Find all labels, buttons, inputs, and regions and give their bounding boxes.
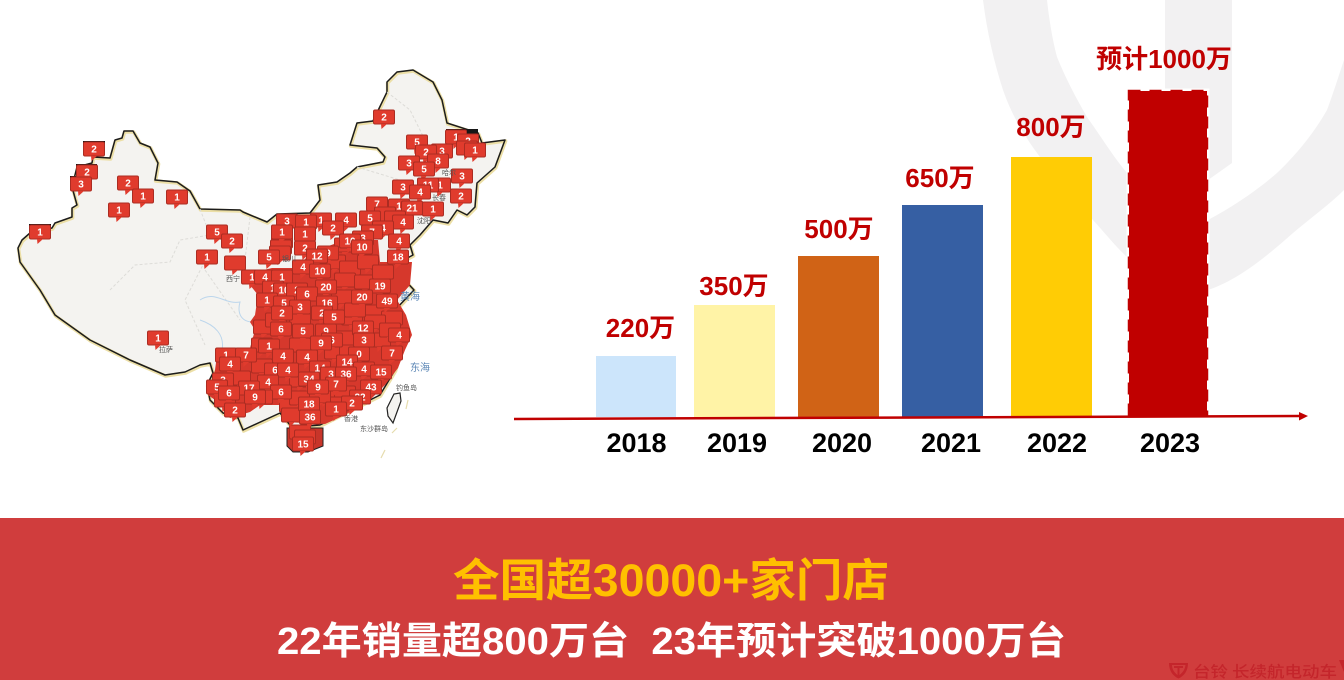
china map xyxy=(18,70,506,458)
numbered markers: 3 xyxy=(439,146,445,158)
bar chart: yearly sales xyxy=(514,44,1308,458)
numbered markers: 9 xyxy=(325,248,331,260)
numbered markers: 1 xyxy=(303,218,309,228)
map land outline xyxy=(18,70,506,431)
numbered markers: 5 xyxy=(414,138,420,148)
numbered markers: 2 xyxy=(349,398,355,410)
numbered markers: 17 xyxy=(243,384,255,394)
numbered markers: 5 xyxy=(421,164,427,176)
year labels xyxy=(606,428,1200,458)
numbered markers: 2 xyxy=(125,178,131,190)
bar 2021 xyxy=(902,205,983,417)
numbered markers: 2 xyxy=(302,244,308,254)
numbered markers: 4 xyxy=(396,330,402,342)
numbered markers: 3 xyxy=(328,370,334,380)
numbered markers: 0 xyxy=(356,350,362,360)
year labels: 2019 xyxy=(707,428,767,458)
numbered markers: 22 xyxy=(354,392,366,404)
bar 2019 xyxy=(694,305,775,417)
numbered markers: 20 xyxy=(320,282,332,294)
numbered markers: 1 xyxy=(223,350,229,362)
numbered markers: 7 xyxy=(389,348,395,360)
numbered markers: 6 xyxy=(226,388,232,400)
year labels: 2022 xyxy=(1027,428,1087,458)
numbered markers: 6 xyxy=(329,336,335,346)
numbered markers: 9 xyxy=(252,392,258,404)
numbered markers: 3 xyxy=(220,376,226,386)
numbered markers: 34 xyxy=(303,374,315,386)
numbered markers: 2 xyxy=(232,406,238,416)
map place labels: 东海 xyxy=(410,359,430,374)
map place labels: 东沙群岛 xyxy=(360,424,388,434)
numbered markers: 1 xyxy=(279,272,285,284)
numbered markers: 4 xyxy=(417,188,423,198)
year labels: 2020 xyxy=(812,428,872,458)
numbered markers: 7 xyxy=(333,380,339,390)
numbered markers: 49 xyxy=(381,296,393,308)
numbered markers: 12 xyxy=(357,324,369,334)
value labels: 预计1000万 xyxy=(1096,44,1232,74)
numbered markers: 2 xyxy=(423,148,429,158)
numbered markers: 2 xyxy=(91,144,97,156)
numbered markers: 36 xyxy=(304,412,316,424)
watermark: logo shield arcs xyxy=(983,0,1344,290)
numbered markers: 8 xyxy=(435,156,441,168)
numbered markers: 9 xyxy=(315,382,321,394)
numbered markers: 1 xyxy=(204,252,210,264)
numbered markers: 3 xyxy=(400,182,406,194)
bottom banner xyxy=(0,518,1344,680)
numbered markers: 14 xyxy=(341,358,353,368)
map place labels: 哈尔 xyxy=(442,168,456,178)
numbered markers: 18 xyxy=(303,400,315,410)
filler markers xyxy=(214,234,402,449)
numbered markers: 4 xyxy=(396,236,402,248)
numbered markers: 5 xyxy=(331,312,337,324)
numbered markers: 4 xyxy=(361,364,367,376)
numbered markers: 3 xyxy=(297,302,303,314)
numbered markers: 6 xyxy=(278,324,284,336)
numbered markers: 1 xyxy=(333,404,339,416)
numbered markers: 5 xyxy=(266,252,272,264)
dense marker mass xyxy=(208,240,412,424)
numbered markers: 4 xyxy=(304,352,310,364)
numbered markers: 5 xyxy=(367,214,373,224)
value labels: 650万 xyxy=(905,163,975,193)
numbered markers: 6 xyxy=(304,290,310,300)
value labels: 220万 xyxy=(606,313,675,343)
numbered markers: 3 xyxy=(284,216,290,228)
numbered markers: 1 xyxy=(264,296,270,306)
numbered markers: 1 xyxy=(453,132,459,144)
numbered markers: 19 xyxy=(374,282,386,292)
numbered markers: 20 xyxy=(356,292,368,304)
numbered markers: 1 xyxy=(430,204,436,216)
numbered markers xyxy=(30,110,486,456)
bar 2018 xyxy=(596,356,676,417)
numbered markers: 1 xyxy=(396,202,402,212)
year labels: 2023 xyxy=(1140,428,1200,458)
numbered markers: 43 xyxy=(365,382,377,394)
numbered markers: 1 xyxy=(140,192,146,202)
numbered markers: 4 xyxy=(265,378,271,388)
banner headline: 全国超30000+家门店 xyxy=(453,555,889,606)
numbered markers: 4 xyxy=(262,272,268,284)
numbered markers: 1 xyxy=(116,206,122,216)
numbered markers: 7 xyxy=(369,228,375,238)
numbered markers: 2 xyxy=(381,112,387,124)
bar 2020 xyxy=(798,256,879,417)
numbered markers: 1 xyxy=(155,334,161,344)
value labels: 800万 xyxy=(1016,112,1086,142)
map place labels: 黄海 xyxy=(400,288,420,303)
numbered markers: 7 xyxy=(374,200,380,210)
bar 2022 xyxy=(1011,157,1092,417)
numbered markers: 10 xyxy=(314,266,326,278)
numbered markers: 2 xyxy=(229,236,235,248)
hainan marker cluster xyxy=(287,428,323,452)
numbered markers: 2 xyxy=(84,168,90,178)
numbered markers: 10 xyxy=(278,286,290,296)
numbered markers: 9 xyxy=(323,326,329,338)
banner subline: 22年销量超800万台 23年预计突破1000万台 xyxy=(277,621,1066,663)
numbered markers: 1 xyxy=(266,342,272,352)
numbered markers: 3 xyxy=(459,172,465,182)
south sea dashes xyxy=(381,400,408,458)
numbered markers: 4 xyxy=(285,366,291,376)
numbered markers: 4 xyxy=(343,216,349,226)
numbered markers: 5 xyxy=(281,298,287,310)
numbered markers: 4 xyxy=(300,262,306,274)
map place labels: 拉萨 xyxy=(159,345,173,355)
numbered markers: 15 xyxy=(375,368,387,378)
edge marker shadows xyxy=(29,129,478,238)
numbered markers: 10 xyxy=(344,236,356,248)
numbered markers: 10 xyxy=(356,242,368,254)
numbered markers: 15 xyxy=(297,440,309,450)
axis arrow xyxy=(514,412,1308,420)
numbered markers: 2 xyxy=(458,192,464,202)
numbered markers: 36 xyxy=(340,370,352,380)
bar 2023 forecast xyxy=(1126,88,1210,416)
map rivers xyxy=(200,297,258,350)
value labels: 350万 xyxy=(699,271,769,301)
numbered markers: 6 xyxy=(278,388,284,398)
numbered markers: 9 xyxy=(318,338,324,350)
numbered markers: 5 xyxy=(214,382,220,394)
numbered markers: 7 xyxy=(243,350,249,362)
numbered markers: 2 xyxy=(319,308,325,320)
numbered markers: 1 xyxy=(174,192,180,204)
numbered markers: 16 xyxy=(321,298,333,310)
numbered markers: 2 xyxy=(465,136,471,148)
numbered markers: 3 xyxy=(392,214,398,224)
numbered markers: 2 xyxy=(330,224,336,234)
numbered markers: 2 xyxy=(294,286,300,296)
numbered markers: 4 xyxy=(400,218,406,228)
numbered markers: 6 xyxy=(272,366,278,376)
numbered markers: 4 xyxy=(227,360,233,370)
numbered markers: 3 xyxy=(361,336,367,346)
numbered markers: 1 xyxy=(302,230,308,240)
year labels: 2018 xyxy=(606,428,667,458)
numbered markers: 14 xyxy=(314,364,326,374)
numbered markers: 2 xyxy=(279,308,285,320)
numbered markers: 1 xyxy=(437,180,443,192)
numbered markers: 1 xyxy=(279,228,285,238)
numbered markers: 3 xyxy=(406,158,412,170)
numbered markers: 3 xyxy=(78,180,84,190)
map place labels: 钓鱼岛 xyxy=(396,383,417,393)
numbered markers: 4 xyxy=(380,224,386,234)
numbered markers: 5 xyxy=(300,326,306,338)
numbered markers: 18 xyxy=(392,252,404,264)
map province borders xyxy=(110,92,425,345)
value labels xyxy=(606,44,1232,343)
map place labels: 沈阳 xyxy=(417,216,431,226)
numbered markers: 4 xyxy=(280,352,286,362)
map place labels: 香港 xyxy=(344,414,358,424)
numbered markers: 1 xyxy=(318,216,324,226)
numbered markers: 1 xyxy=(249,272,255,284)
numbered markers: 1 xyxy=(270,284,276,294)
numbered markers: 3 xyxy=(360,234,366,244)
numbered markers: 11 xyxy=(423,180,434,192)
year labels: 2021 xyxy=(921,428,981,458)
numbered markers: 21 xyxy=(406,204,418,214)
map place labels: 长春 xyxy=(432,193,446,203)
value labels: 500万 xyxy=(804,214,874,244)
numbered markers: 12 xyxy=(311,252,323,262)
numbered markers: 1 xyxy=(37,228,43,238)
numbered markers: 5 xyxy=(214,228,220,238)
map place labels xyxy=(159,168,456,434)
map place labels: 西宁 xyxy=(226,274,240,284)
island: taiwan xyxy=(387,393,401,423)
map place labels: 银川 xyxy=(282,254,296,264)
numbered markers: 1 xyxy=(472,146,478,156)
